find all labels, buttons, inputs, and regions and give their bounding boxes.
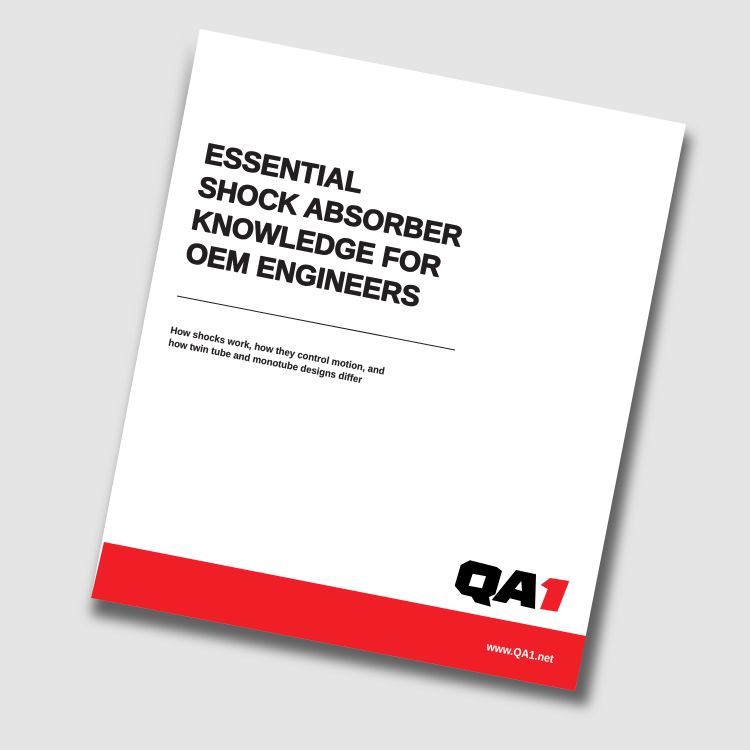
red footer band xyxy=(91,542,586,691)
title: KNOWLEDGE FOR xyxy=(189,204,444,284)
subtitle: how twin tube and monotube designs differ xyxy=(167,338,363,386)
subtitle: How shocks work, how they control motion, and xyxy=(169,325,386,378)
title: SHOCK ABSORBER xyxy=(196,171,465,254)
letter Q xyxy=(455,560,502,607)
page sheet xyxy=(91,29,686,691)
page shadow xyxy=(91,40,691,706)
title: OEM ENGINEERS xyxy=(183,237,423,314)
title: ESSENTIAL xyxy=(202,138,365,200)
divider rule xyxy=(177,296,455,350)
title xyxy=(183,138,465,314)
QA1 logo xyxy=(455,560,569,612)
letter A xyxy=(492,570,536,609)
numeral 1 xyxy=(540,578,569,612)
brochure page xyxy=(91,29,686,691)
website url: www.QA1.net xyxy=(485,641,555,666)
